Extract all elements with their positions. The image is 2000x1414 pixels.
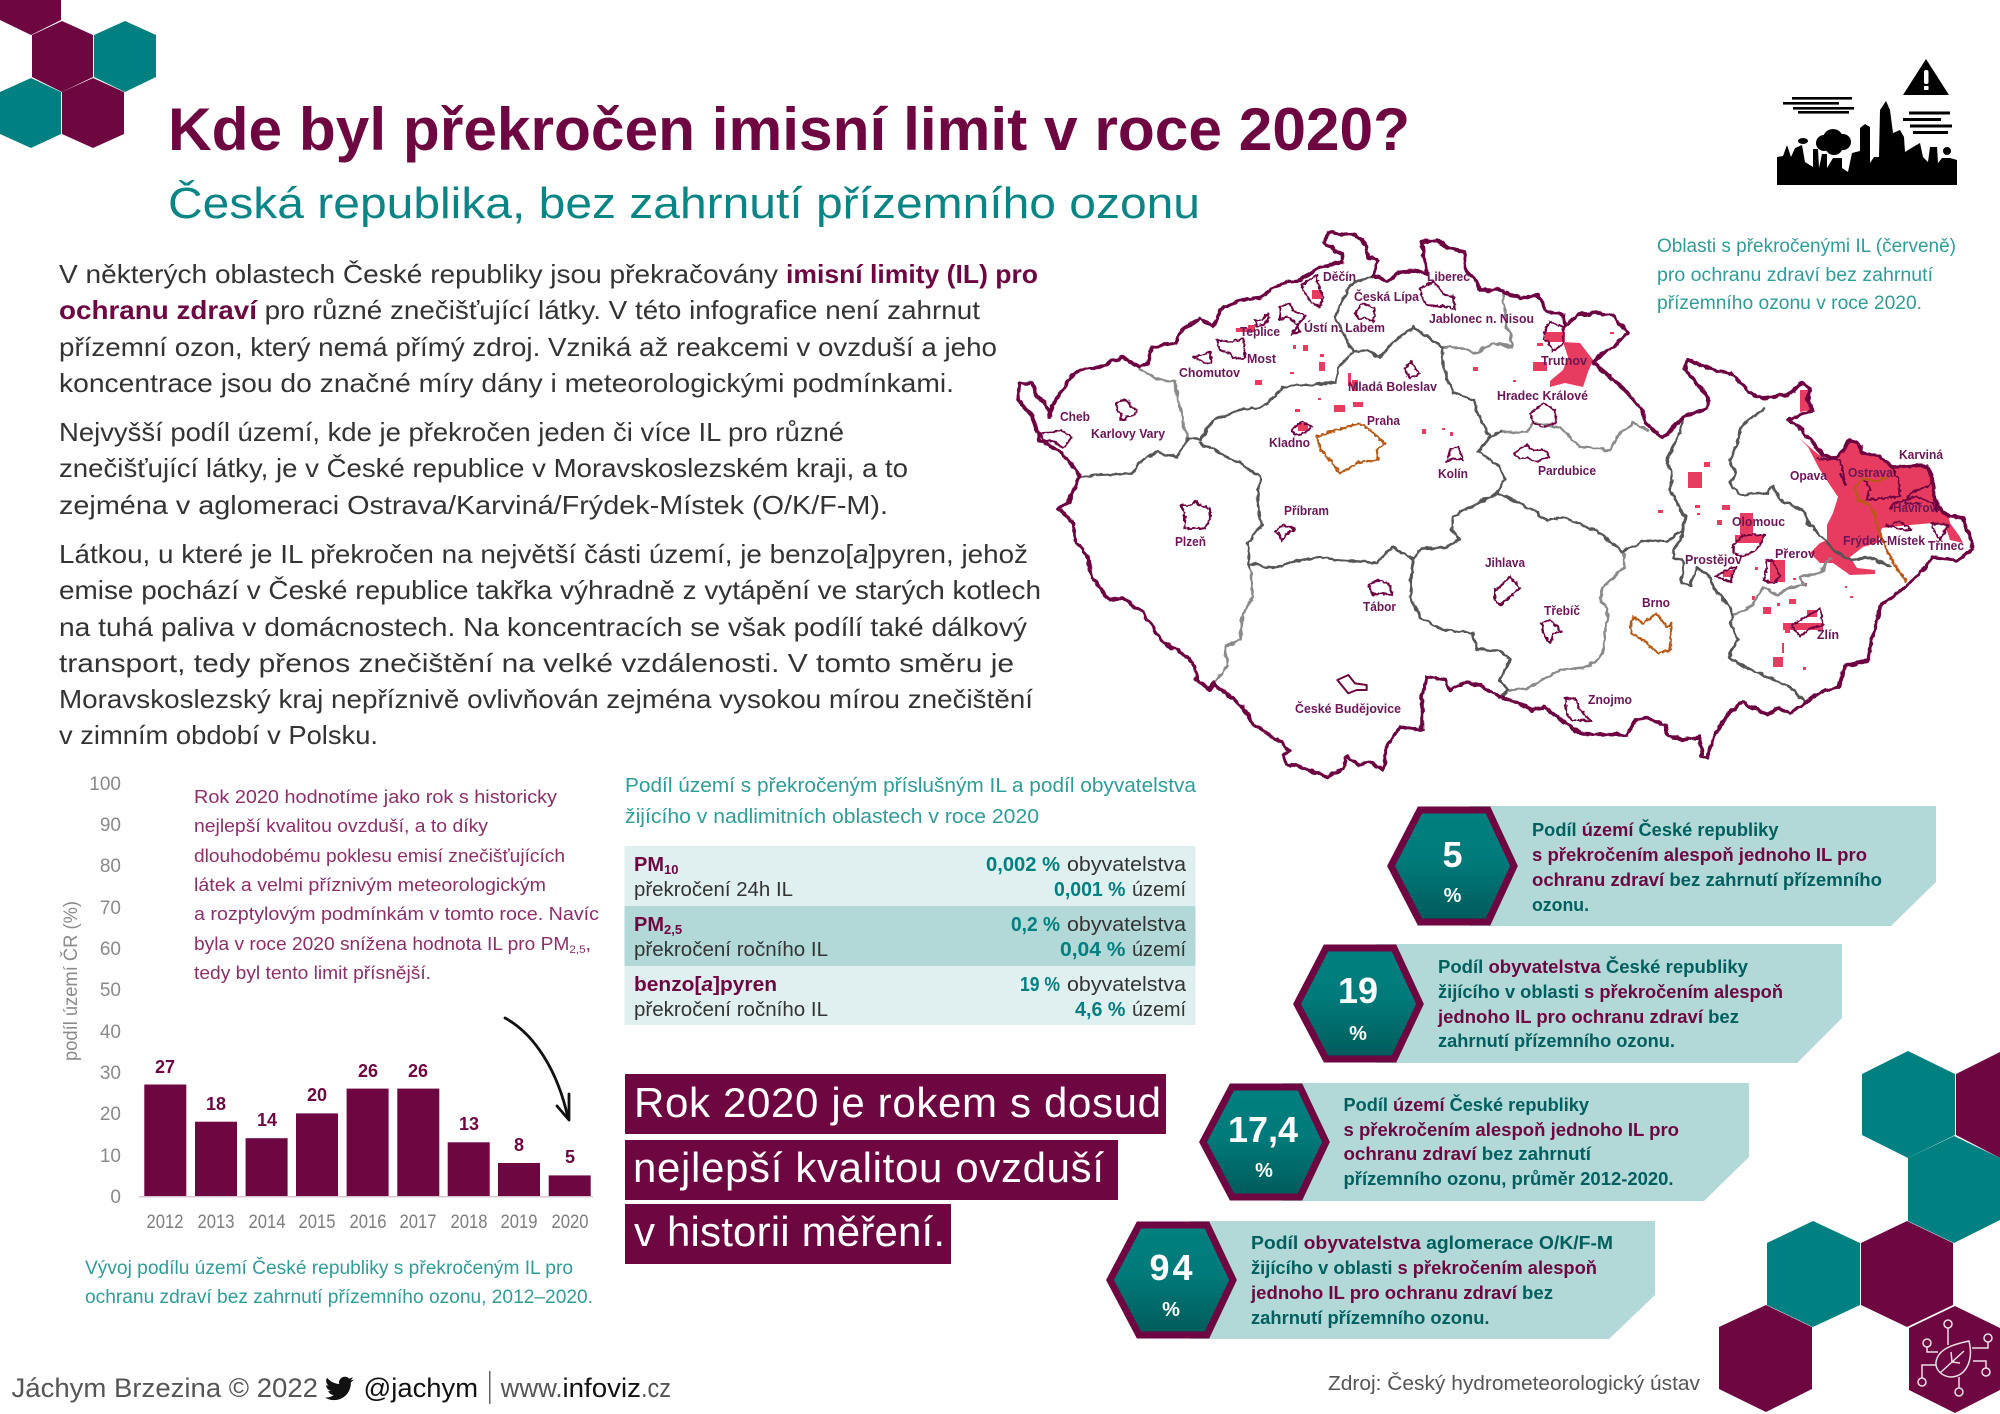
intro text block: zejména v aglomeraci Ostrava/Karviná/Frýdek-Místek (O/K/F-M). bbox=[59, 490, 888, 520]
town labels: Třebíč bbox=[1544, 604, 1580, 618]
map caption: pro ochranu zdraví bez zahrnutí bbox=[1657, 265, 1934, 286]
year labels: 2014 bbox=[248, 1212, 286, 1233]
year labels: 2016 bbox=[350, 1212, 386, 1233]
intro text block: Látkou, u které je IL překročen na největší části území, je benzo[ a]pyren, jehož bbox=[59, 539, 1028, 569]
town outlines east bbox=[1495, 322, 1948, 722]
map caption bbox=[1657, 236, 1956, 314]
town labels: Třinec bbox=[1928, 539, 1964, 553]
stat card: 94 % of agglomeration population: žijícího v oblasti s překročením alespoň bbox=[1251, 1257, 1597, 1278]
y axis ticks: 100 bbox=[89, 774, 121, 795]
year labels: 2020 bbox=[552, 1212, 588, 1233]
town labels: Most bbox=[1247, 352, 1277, 366]
town labels: Karlovy Vary bbox=[1091, 427, 1165, 441]
chart caption bbox=[85, 1257, 593, 1308]
stat card: 19 % of population: 19 bbox=[1338, 970, 1378, 1011]
table heading: Podíl území s překročeným příslušným IL a podíl obyvatelstva bbox=[625, 775, 1197, 797]
row PM2.5: obyvatelstva bbox=[1067, 914, 1187, 936]
town labels: Karviná bbox=[1899, 448, 1943, 462]
town labels: Kladno bbox=[1269, 436, 1310, 450]
town labels: Kolín bbox=[1438, 467, 1468, 481]
year labels: 2017 bbox=[400, 1212, 436, 1233]
icon: leaf with circuit nodes bbox=[1918, 1320, 1992, 1396]
stat card: 5 % of territory: ochranu zdraví bez zahrnutí přízemního bbox=[1532, 869, 1882, 890]
headline banner bbox=[625, 1074, 1166, 1264]
town labels: Havířov bbox=[1893, 501, 1936, 515]
title: Kde byl překročen imisní limit v roce 2020? bbox=[168, 96, 1410, 163]
y axis ticks: 60 bbox=[100, 939, 121, 960]
stat card: 19 % of population bbox=[1297, 944, 1842, 1063]
chart annotation text: dlouhodobému poklesu emisí znečišťujících bbox=[194, 846, 565, 866]
map caption: přízemního ozonu v roce 2020. bbox=[1657, 293, 1922, 314]
town outline České Budějovice bbox=[1337, 675, 1367, 693]
row PM2.5: 0,04 % bbox=[1060, 939, 1126, 961]
row benzo[a]pyren: 4,6 % bbox=[1075, 999, 1126, 1021]
intro text block bbox=[59, 259, 1041, 750]
map of the Czech Republic bbox=[1018, 232, 1972, 777]
stat card: 19 % of population: Podíl obyvatelstva České republiky bbox=[1438, 956, 1749, 977]
intro text block: transport, tedy přenos znečištění na velké vzdálenosti. V tomto směru je bbox=[59, 648, 1014, 678]
stat card: 17,4 % average: přízemního ozonu, průměr 2012-2020. bbox=[1344, 1168, 1674, 1189]
row benzo[a]pyren: překročení ročního IL bbox=[634, 999, 828, 1021]
chart annotation text: nejlepší kvalitou ovzduší, a to díky bbox=[194, 816, 488, 836]
town labels: Olomouc bbox=[1732, 515, 1785, 529]
y axis ticks: 90 bbox=[100, 815, 121, 836]
map caption: Oblasti s překročenými IL (červeně) bbox=[1657, 236, 1956, 257]
footer: author credit: infoviz bbox=[562, 1373, 641, 1403]
town labels: Ostrava bbox=[1848, 466, 1894, 480]
stat card: 5 % of territory: ozonu. bbox=[1532, 894, 1589, 915]
stat card: 5 % of territory: Podíl území České republiky bbox=[1532, 819, 1779, 840]
row PM10: překročení 24h IL bbox=[634, 879, 793, 901]
bar values: 20 bbox=[307, 1085, 327, 1105]
row PM10: 0,001 % bbox=[1054, 879, 1126, 901]
stat card: 94 % of agglomeration population: % bbox=[1162, 1299, 1180, 1321]
stat card: 19 % of population: jednoho IL pro ochranu zdraví bez bbox=[1437, 1006, 1739, 1027]
town labels: Česká Lípa bbox=[1354, 289, 1420, 304]
town labels: Praha bbox=[1367, 414, 1401, 428]
year labels: 2015 bbox=[298, 1212, 336, 1233]
row PM10: obyvatelstva bbox=[1067, 854, 1187, 876]
town labels: Pardubice bbox=[1538, 464, 1596, 478]
y axis ticks: 30 bbox=[100, 1063, 121, 1084]
town labels: Přerov bbox=[1775, 547, 1815, 561]
town labels: Ústí n. Labem bbox=[1304, 320, 1385, 335]
chart annotation text: 2,5 bbox=[569, 944, 586, 956]
town labels: Mladá Boleslav bbox=[1348, 380, 1437, 394]
footer: author credit: Jáchym Brzezina © 2022 bbox=[12, 1373, 318, 1403]
stat card: 17,4 % average: 17,4 bbox=[1228, 1109, 1298, 1150]
stat card: 94 % of agglomeration population: 94 bbox=[1150, 1247, 1192, 1288]
decorative hexagons bottom right bbox=[1719, 1051, 2000, 1413]
town labels: Znojmo bbox=[1588, 693, 1632, 707]
chart annotation text: a rozptylovým podmínkám v tomto roce. Navíc bbox=[194, 904, 599, 924]
bar values: 26 bbox=[408, 1061, 428, 1081]
row benzo[a]pyren bbox=[624, 966, 1196, 1025]
year labels: 2018 bbox=[450, 1212, 488, 1233]
row benzo[a]pyren: 19 % bbox=[1020, 974, 1060, 996]
town labels: Příbram bbox=[1284, 504, 1329, 518]
chart annotation text bbox=[194, 787, 599, 983]
intro text block: emise pochází v České republice takřka výhradně z vytápění ve starých kotlech bbox=[59, 575, 1041, 605]
footer: author credit: .cz bbox=[641, 1373, 671, 1403]
bar values: 26 bbox=[358, 1061, 378, 1081]
row PM2.5: území bbox=[1132, 939, 1186, 961]
region and country borders bbox=[1018, 232, 1972, 777]
stat card: 17,4 % average: Podíl území České republiky bbox=[1344, 1094, 1590, 1115]
town labels: Děčín bbox=[1323, 270, 1356, 284]
stat card: 17,4 % average: s překročením alespoň jednoho IL pro bbox=[1344, 1119, 1679, 1140]
agglomeration outlines Praha, Brno, Ostrava bbox=[1317, 423, 1907, 653]
town labels: Opava bbox=[1790, 469, 1828, 483]
chart annotation text: Rok 2020 hodnotíme jako rok s historicky bbox=[194, 787, 557, 807]
town labels: České Budějovice bbox=[1295, 701, 1401, 716]
bar values: 27 bbox=[155, 1057, 175, 1077]
y axis ticks bbox=[89, 774, 121, 1208]
intro text block: V některých oblastech České republiky jsou překračovány bbox=[59, 259, 778, 289]
bar values: 8 bbox=[514, 1135, 524, 1155]
row PM10: PM bbox=[634, 854, 664, 876]
stat card: 5 % of territory: s překročením alespoň jednoho IL pro bbox=[1532, 844, 1867, 865]
row benzo[a]pyren: benzo[a]pyren bbox=[634, 974, 777, 996]
table heading: žijícího v nadlimitních oblastech v roce 2020 bbox=[625, 806, 1039, 828]
stat card: 5 % of territory bbox=[1391, 806, 1936, 926]
footer: author credit: @jachym bbox=[364, 1373, 478, 1403]
year labels: 2012 bbox=[146, 1212, 184, 1233]
icon: twitter bird bbox=[325, 1377, 354, 1400]
row PM2.5: překročení ročního IL bbox=[634, 939, 828, 961]
chart caption: Vývoj podílu území České republiky s překročeným IL pro bbox=[85, 1257, 573, 1279]
chart annotation text: , bbox=[586, 934, 591, 954]
bar values: 5 bbox=[565, 1147, 575, 1167]
stat card: 19 % of population: zahrnutí přízemního ozonu. bbox=[1438, 1030, 1675, 1051]
stat card: 17,4 % average bbox=[1203, 1083, 1749, 1201]
y axis ticks: 70 bbox=[100, 898, 121, 919]
town labels: Hradec Králové bbox=[1497, 389, 1588, 403]
footer: author credit bbox=[12, 1371, 671, 1404]
stat card: 94 % of agglomeration population: jednoho IL pro ochranu zdraví bez bbox=[1250, 1282, 1553, 1303]
row PM2.5 bbox=[624, 906, 1196, 966]
chart annotation text: byla v roce 2020 snížena hodnota IL pro PM bbox=[194, 934, 547, 954]
town labels: Brno bbox=[1642, 596, 1670, 610]
icon: polluted city skyline with warning bbox=[1777, 59, 1957, 185]
stat card: 94 % of agglomeration population: Podíl obyvatelstva aglomerace O/K/F-M bbox=[1251, 1232, 1613, 1253]
footer: author credit: www. bbox=[500, 1373, 563, 1403]
stat card: 94 % of agglomeration population: zahrnutí přízemního ozonu. bbox=[1251, 1307, 1490, 1328]
row PM2.5: PM bbox=[634, 914, 664, 936]
town labels: Jablonec n. Nisou bbox=[1429, 312, 1534, 326]
y axis ticks: 0 bbox=[110, 1187, 121, 1208]
table of pollutants bbox=[624, 846, 1196, 1025]
intro text block: znečišťující látky, je v České republice v Moravskoslezském kraji, a to bbox=[59, 453, 908, 483]
year labels: 2019 bbox=[500, 1212, 538, 1233]
town outlines west and centre bbox=[1040, 275, 1463, 595]
stat card: 19 % of population: % bbox=[1349, 1023, 1367, 1045]
town labels: Chomutov bbox=[1179, 366, 1240, 380]
bar values: 14 bbox=[257, 1110, 277, 1130]
row PM10 bbox=[624, 846, 1196, 906]
row PM10: 0,002 % bbox=[986, 854, 1060, 876]
intro text block: Moravskoslezský kraj nepříznivě ovlivňován zejména vysokou mírou znečištění bbox=[59, 684, 1034, 714]
stat card: 5 % of territory: % bbox=[1444, 885, 1462, 907]
row PM10: 10 bbox=[664, 862, 678, 877]
bar values: 18 bbox=[206, 1094, 226, 1114]
bar values: 13 bbox=[459, 1114, 479, 1134]
town labels: Zlín bbox=[1817, 628, 1839, 642]
town labels bbox=[1060, 270, 1964, 716]
town labels: Liberec bbox=[1427, 270, 1470, 284]
row PM2.5: 2,5 bbox=[664, 922, 682, 937]
town labels: Frýdek-Místek bbox=[1843, 534, 1925, 548]
row benzo[a]pyren: území bbox=[1132, 999, 1186, 1021]
year labels: 2013 bbox=[198, 1212, 234, 1233]
red exceedance areas bbox=[1236, 290, 1963, 670]
town labels: Prostějov bbox=[1685, 553, 1742, 567]
table heading bbox=[625, 775, 1197, 828]
y axis ticks: 80 bbox=[100, 856, 121, 877]
headline banner: nejlepší kvalitou ovzduší bbox=[633, 1144, 1104, 1191]
intro text block: imisní limity (IL) pro bbox=[786, 259, 1038, 289]
y axis ticks: 40 bbox=[100, 1022, 121, 1043]
stat card: 17,4 % average: % bbox=[1255, 1160, 1273, 1182]
bar values bbox=[155, 1057, 575, 1167]
town labels: Jihlava bbox=[1485, 556, 1526, 570]
year labels bbox=[146, 1212, 588, 1233]
stat card: 17,4 % average: ochranu zdraví bez zahrnutí bbox=[1344, 1143, 1592, 1164]
arrow pointing to 2020 bar bbox=[505, 1018, 569, 1120]
y axis title: podíl území ČR (%) bbox=[60, 901, 82, 1061]
y axis ticks: 10 bbox=[100, 1146, 121, 1167]
subtitle: Česká republika, bez zahrnutí přízemního ozonu bbox=[168, 178, 1200, 228]
row PM2.5: 0,2 % bbox=[1011, 914, 1060, 936]
headline banner: v historii měření. bbox=[634, 1208, 945, 1255]
stat card: 5 % of territory: 5 bbox=[1442, 834, 1463, 875]
chart annotation text: látek a velmi příznivým meteorologickým bbox=[194, 875, 546, 895]
bar chart: share of territory 2012-2020 bbox=[60, 774, 593, 1233]
chart caption: ochranu zdraví bez zahrnutí přízemního ozonu, 2012–2020. bbox=[85, 1287, 593, 1308]
intro text block: přízemní ozon, který nemá přímý zdroj. Vzniká až reakcemi v ovzduší a jeho bbox=[59, 332, 997, 362]
town labels: Teplice bbox=[1240, 325, 1280, 339]
town labels: Cheb bbox=[1060, 410, 1090, 424]
town labels: Plzeň bbox=[1175, 535, 1206, 549]
source note: Zdroj: Český hydrometeorologický ústav bbox=[1328, 1372, 1700, 1395]
intro text block: v zimním období v Polsku. bbox=[59, 720, 378, 750]
decorative hexagons top left bbox=[0, 0, 156, 148]
town labels: Trutnov bbox=[1541, 354, 1587, 368]
headline banner: Rok 2020 je rokem s dosud bbox=[634, 1079, 1161, 1126]
row benzo[a]pyren: obyvatelstva bbox=[1067, 974, 1187, 996]
y axis ticks: 50 bbox=[100, 980, 121, 1001]
bars bbox=[144, 1084, 591, 1196]
row PM10: území bbox=[1132, 879, 1186, 901]
y axis ticks: 20 bbox=[100, 1104, 121, 1125]
town labels: Tábor bbox=[1363, 600, 1396, 614]
chart annotation text: tedy byl tento limit přísnější. bbox=[194, 963, 431, 983]
stat card: 94 % of agglomeration population bbox=[1110, 1221, 1655, 1339]
intro text block: ochranu zdraví pro různé znečišťující látky. V této infografice není zahrnut bbox=[59, 295, 981, 325]
intro text block: koncentrace jsou do značné míry dány i meteorologickými podmínkami. bbox=[59, 368, 954, 398]
intro text block: na tuhá paliva v domácnostech. Na koncentracích se však podílí také dálkový bbox=[59, 612, 1027, 642]
intro text block: Nejvyšší podíl území, kde je překročen jeden či více IL pro různé bbox=[59, 417, 844, 447]
stat card: 19 % of population: žijícího v oblasti s překročením alespoň bbox=[1438, 981, 1783, 1002]
